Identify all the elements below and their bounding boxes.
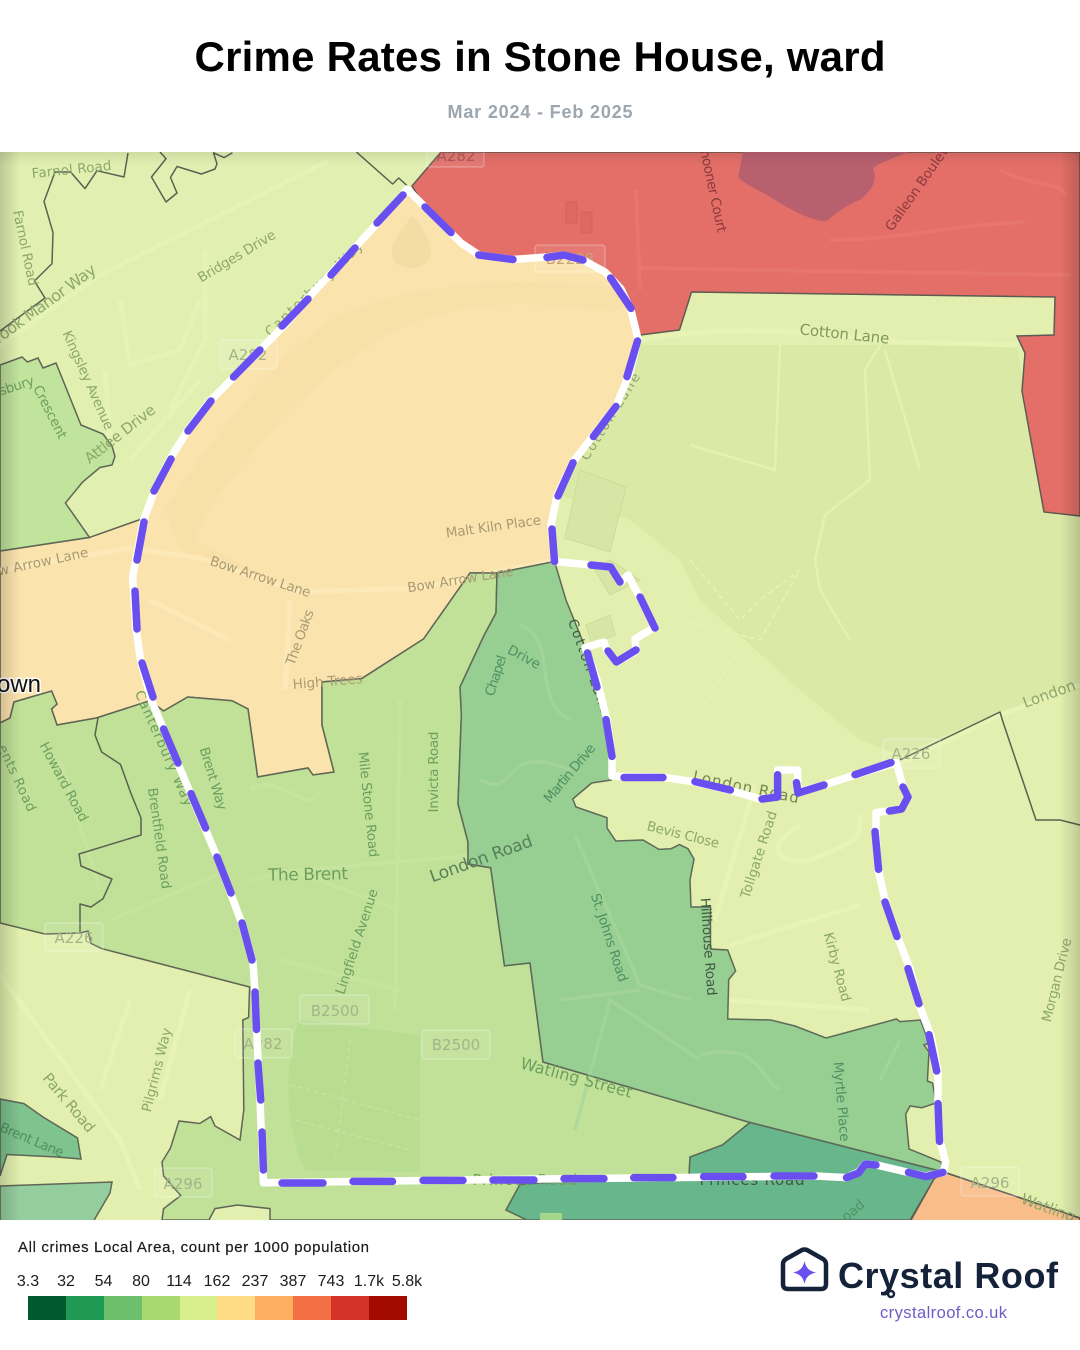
road label: A282 bbox=[244, 1035, 282, 1053]
zone: orange triangle bbox=[910, 1172, 1080, 1222]
pale zone paths bbox=[690, 345, 920, 640]
boundary: west mid wards bbox=[79, 718, 141, 933]
street: London Road: London Road bbox=[427, 831, 535, 887]
street: Cotton Lane: Cotton Lane bbox=[564, 617, 613, 716]
street: Farnol Road: Farnol Road bbox=[31, 158, 112, 182]
street: Invicta Road: Invicta Road bbox=[426, 732, 442, 812]
street: Kingsley Avenue: Kingsley Avenue bbox=[59, 328, 117, 433]
icon: house outline bbox=[783, 1250, 826, 1289]
street: St. Johns Road: St. Johns Road bbox=[587, 892, 631, 984]
street: Bow Arrow Lane: Bow Arrow Lane bbox=[406, 564, 514, 596]
street: Kirby Road: Kirby Road bbox=[820, 931, 854, 1003]
legend value labels: 1.7k bbox=[354, 1273, 385, 1290]
shield A296 west bbox=[154, 1168, 212, 1197]
street: Bow Arrow Lane: Bow Arrow Lane bbox=[208, 553, 313, 601]
mid green: roads bbox=[467, 854, 468, 858]
legend value labels: 387 bbox=[280, 1273, 306, 1290]
website url: crystalroof.co.uk bbox=[880, 1304, 1008, 1322]
street: London Road: London Road bbox=[691, 767, 801, 807]
street: Park Road: Park Road bbox=[39, 1069, 99, 1136]
place: The Brent: The Brent bbox=[267, 864, 348, 886]
shield B2500 east bbox=[422, 1030, 490, 1059]
street: Chapel: Chapel bbox=[482, 653, 510, 698]
upper-left zone roads bbox=[107, 438, 108, 440]
boundary: A226 to east bbox=[900, 712, 1080, 825]
zone: mid green bbox=[0, 573, 750, 1220]
street: Attlee Drive: Attlee Drive bbox=[81, 401, 159, 467]
zone: upper-left pale green bbox=[0, 152, 441, 551]
green patch at bottom bbox=[540, 1213, 562, 1220]
street: Watling stub: Watling bbox=[1019, 1190, 1078, 1226]
street: Canterbury Way: Canterbury Way bbox=[131, 688, 196, 809]
road label: B2500 bbox=[432, 1036, 480, 1054]
road label: A296 bbox=[971, 1174, 1009, 1192]
peach zone: roads bbox=[0, 548, 554, 690]
street: Drive: Drive bbox=[505, 642, 543, 673]
legend value labels: 54 bbox=[95, 1273, 112, 1290]
street: Cotton Lane: Cotton Lane bbox=[799, 320, 890, 348]
logo: Crystal Roof bbox=[783, 1250, 1059, 1322]
boundary: north-west wards bbox=[0, 153, 128, 331]
mid green: cemetery paths bbox=[290, 1040, 420, 1160]
road label: A282 bbox=[437, 147, 475, 165]
street: High Trees: High Trees bbox=[292, 671, 363, 693]
zone: high crime red bbox=[412, 152, 1080, 516]
street: Canterbury Way: Canterbury Way bbox=[262, 238, 367, 340]
lake bbox=[738, 152, 908, 221]
peach zone: pond bbox=[392, 216, 431, 268]
street: Pilgrims Way: Pilgrims Way bbox=[139, 1026, 175, 1114]
street: Schooner Court: hooner Court bbox=[696, 148, 729, 234]
street: Cotton Lane: Cotton Lane bbox=[577, 370, 644, 464]
street: Bevis Close: Bevis Close bbox=[645, 818, 721, 852]
legend value labels bbox=[17, 1273, 423, 1290]
park footpaths bbox=[680, 560, 800, 710]
street: London Road: London bbox=[1020, 676, 1078, 712]
icon: purple star bbox=[793, 1261, 816, 1284]
road label: A226 bbox=[892, 745, 930, 763]
zone boundary lines bbox=[0, 152, 1080, 933]
zone: peach medium-high bbox=[0, 189, 638, 777]
shield A282 west bbox=[220, 340, 277, 369]
street: Farnol Road: Farnol Road bbox=[9, 209, 41, 287]
icon: keyhole on y descender bbox=[888, 1291, 894, 1297]
street: road stub: oad bbox=[839, 1197, 868, 1225]
roads in red zone bbox=[636, 170, 1070, 290]
road shields bbox=[45, 144, 1019, 1197]
legend value labels: 32 bbox=[57, 1273, 75, 1290]
shield A282 south bbox=[235, 1029, 292, 1058]
legend value labels: 114 bbox=[166, 1273, 192, 1290]
street: Bridges Drive: Bridges Drive bbox=[195, 227, 279, 286]
street: Crescent: Crescent bbox=[29, 383, 70, 442]
ward boundary: white casing bbox=[133, 189, 946, 1183]
mid green: cemetery shading bbox=[289, 1020, 420, 1172]
zone: bottom-left green bbox=[0, 1182, 112, 1222]
boundary: top to ward corner bbox=[356, 152, 407, 186]
street: Tollgate Road: Tollgate Road bbox=[737, 809, 781, 901]
buildings in red zone bbox=[566, 202, 592, 233]
title: Crime Rates in Stone House, ward bbox=[194, 33, 886, 80]
legend title: All crimes Local Area, count per 1000 population bbox=[18, 1239, 369, 1256]
legend bbox=[17, 1239, 423, 1320]
road label: A282 bbox=[229, 346, 267, 364]
shield A226 west bbox=[45, 923, 103, 951]
boundary: north wards bbox=[152, 152, 232, 202]
pale zone roads bbox=[932, 345, 1080, 712]
road label: A226 bbox=[55, 929, 93, 947]
street: Brent Way: Brent Way bbox=[196, 745, 230, 812]
street: Howard Road: Howard Road bbox=[36, 740, 91, 825]
street: Morgan Drive: Morgan Drive bbox=[1039, 936, 1075, 1024]
street: Malt Kiln Place: Malt Kiln Place bbox=[445, 512, 542, 542]
shield A296 east bbox=[961, 1167, 1019, 1196]
pale zone: building plots bbox=[565, 470, 640, 645]
legend colour scale bbox=[28, 1296, 407, 1320]
road label: B2500 bbox=[311, 1002, 359, 1020]
legend value labels: 3.3 bbox=[17, 1273, 39, 1290]
ward boundary: purple dashes bbox=[135, 195, 943, 1183]
street: Lingfield Avenue: Lingfield Avenue bbox=[333, 887, 382, 997]
peach zone: tan racetrack shading bbox=[165, 282, 622, 590]
legend value labels: 743 bbox=[318, 1273, 344, 1290]
road label: B2228 bbox=[546, 250, 594, 268]
street: Princes Road: Princes Road bbox=[700, 1171, 804, 1189]
street: Watling Street: Watling Street bbox=[518, 1054, 634, 1102]
shield A282 north bbox=[426, 152, 485, 168]
legend value labels: 5.8k bbox=[392, 1273, 423, 1290]
map base: low crime pale zone bbox=[0, 152, 1080, 1220]
legend value labels: 162 bbox=[204, 1273, 230, 1290]
shield B2228 bbox=[535, 245, 605, 272]
street: Hillhouse Road: Hillhouse Road bbox=[697, 897, 719, 996]
street: Brentfield Road: Brentfield Road bbox=[144, 787, 174, 890]
zone: park east of ward bbox=[560, 345, 1080, 755]
street: Mile Stone Road: Mile Stone Road bbox=[354, 751, 381, 858]
shield B2500 west bbox=[300, 995, 369, 1024]
street: The Oaks: The Oaks bbox=[282, 608, 318, 669]
subtitle: date range: Mar 2024 - Feb 2025 bbox=[448, 102, 632, 122]
legend value labels: 80 bbox=[132, 1273, 150, 1290]
map edge shadow bbox=[0, 152, 1080, 1220]
street: Princes Road: Princes Road bbox=[472, 1171, 578, 1189]
brand name: Crystal Roof bbox=[838, 1255, 1059, 1296]
zone: green lower crime bbox=[458, 562, 944, 1172]
shield A226 east bbox=[883, 739, 940, 768]
zone: dark green strip bbox=[506, 1122, 944, 1220]
legend value labels: 237 bbox=[242, 1273, 268, 1290]
road label: A296 bbox=[164, 1175, 202, 1193]
Watling Street line east bbox=[944, 1172, 1080, 1218]
zone: Crescent green bbox=[0, 357, 115, 551]
street: Galleon Boulevard: Galleon Boulev bbox=[882, 143, 953, 234]
green zone: roads bbox=[480, 625, 900, 1130]
street: Martin Drive: Martin Drive bbox=[541, 741, 599, 806]
street: Myrtle Place: Myrtle Place bbox=[830, 1061, 852, 1142]
zone: Brent Lane green bbox=[0, 1099, 81, 1176]
